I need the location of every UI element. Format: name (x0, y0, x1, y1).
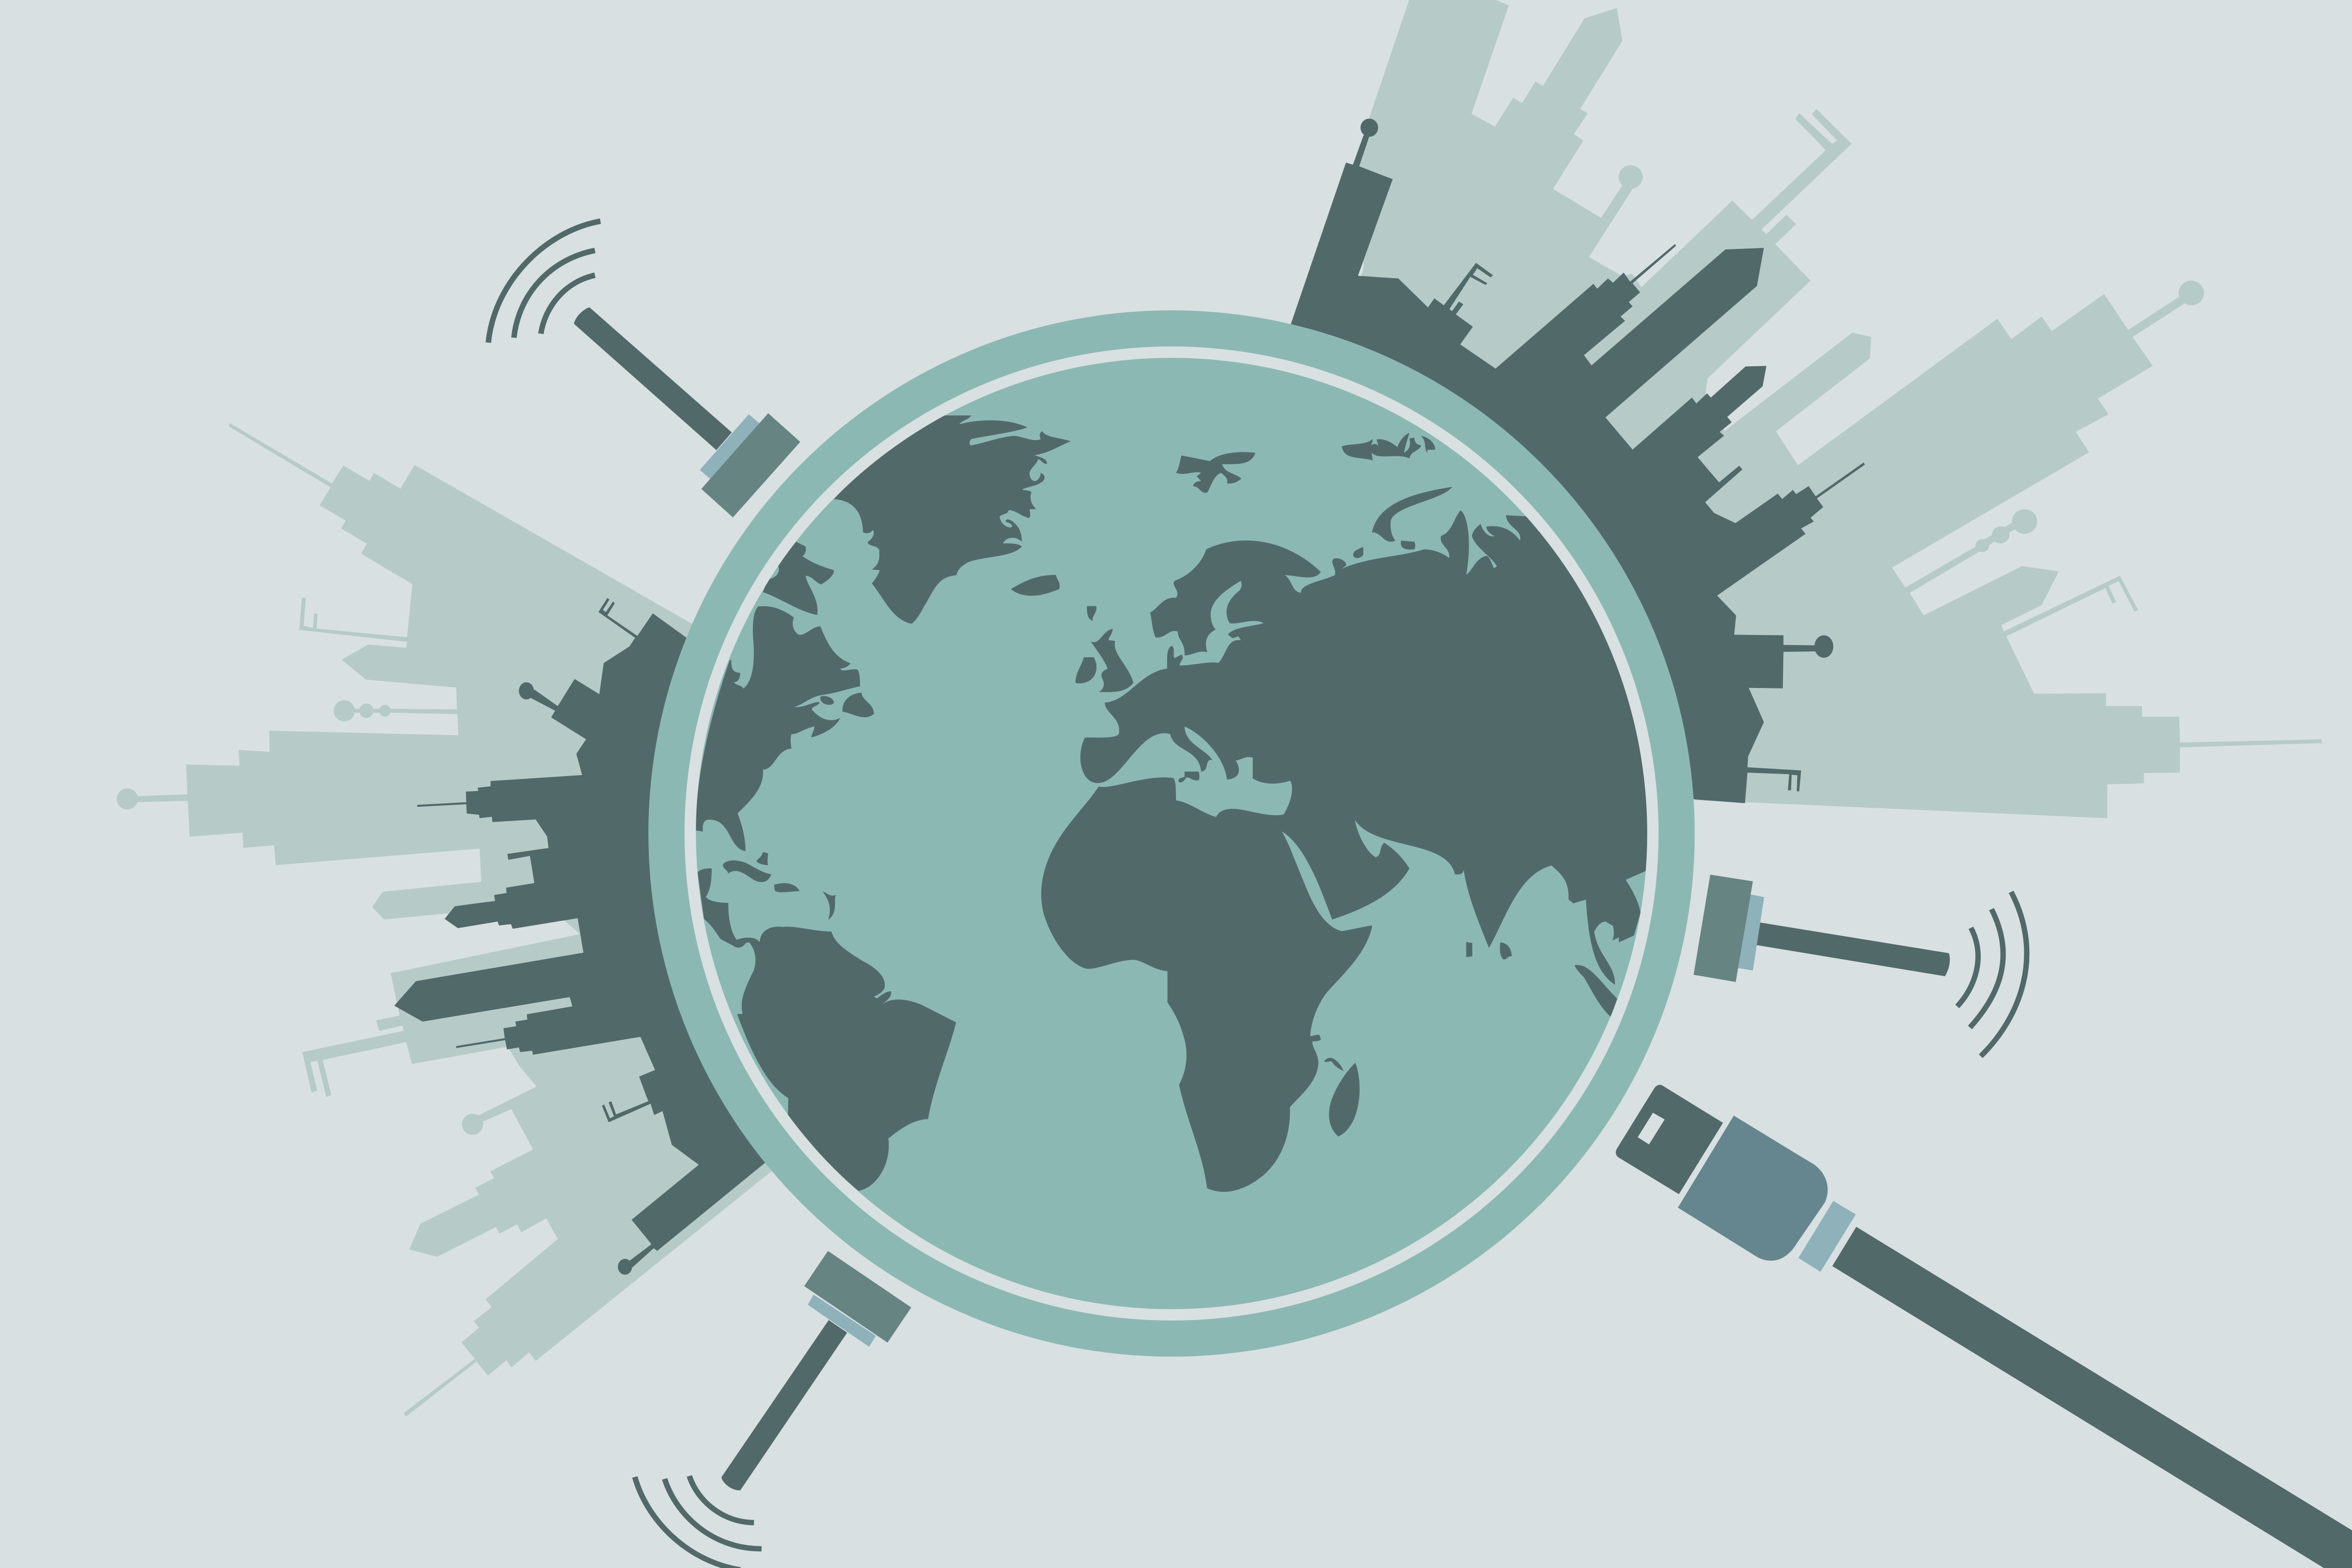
antenna: right with signal waves (1694, 875, 2027, 1056)
USB cable (1832, 1227, 2352, 1568)
foreground skyline: left (394, 595, 792, 1275)
globe outer ring (648, 310, 1695, 1357)
land: North America and Greenland (696, 415, 1071, 851)
background skyline: upper right (1332, 0, 2322, 818)
USB plug and cable (1616, 1085, 2352, 1568)
background skyline: left (117, 423, 792, 1417)
USB collar (1799, 1201, 1856, 1272)
world map continents (696, 415, 1708, 1192)
USB head slot (1638, 1113, 1665, 1144)
land: Southeast Asian island (1574, 965, 1617, 1017)
land: Central and South America (697, 852, 956, 1191)
USB body (1678, 1116, 1828, 1261)
land: Eurasia (1076, 433, 1708, 985)
globe inner light ring (690, 352, 1653, 1315)
land: Africa and Madagascar (1041, 778, 1372, 1192)
foreground skyline: upper right (1291, 119, 1865, 803)
USB metal head (1616, 1085, 1723, 1194)
antenna: top left with signal waves (489, 221, 800, 517)
antenna: bottom with signal waves (635, 1251, 911, 1568)
